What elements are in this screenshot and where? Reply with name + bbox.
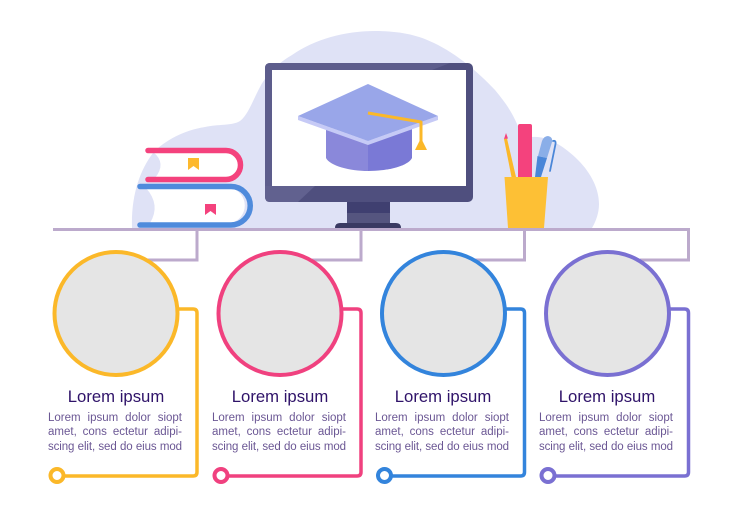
step 1 text: sed — [98, 440, 117, 452]
step 4 text: adipi- — [645, 426, 673, 438]
step 3 text: scing — [375, 440, 401, 452]
step 1 text: siopt — [158, 412, 182, 424]
step 4 text: cons — [574, 426, 598, 438]
step 4 text: scing — [539, 440, 565, 452]
monitor frame — [265, 63, 473, 202]
shelf and connectors — [53, 230, 688, 260]
step 2 text: Lorem ipsum — [232, 387, 328, 406]
step 2 text: adipi- — [318, 426, 346, 438]
step 4 text: do — [611, 440, 624, 452]
step 2 text: eius — [300, 440, 321, 452]
step 2 text: sed — [262, 440, 281, 452]
step 3 graphic — [378, 252, 524, 482]
monitor stand — [335, 202, 401, 228]
icon: monitor with graduation cap — [265, 63, 473, 228]
step 1 text: dolor — [125, 412, 151, 424]
step 4 text: amet, — [539, 426, 568, 438]
step 2 text — [212, 387, 346, 452]
step 1 text: amet, — [48, 426, 77, 438]
step 2 text: siopt — [322, 412, 346, 424]
pen — [550, 141, 556, 171]
step 2 graphic — [214, 252, 361, 482]
step 2 text: Lorem — [212, 412, 245, 424]
step 4 text: ectetur — [604, 426, 639, 438]
monitor screen — [272, 70, 466, 186]
step 1 text: Lorem ipsum — [68, 387, 164, 406]
step 3 text: sed — [425, 440, 444, 452]
icon: book stack — [140, 150, 250, 225]
tassel — [368, 113, 421, 141]
step 4 text: dolor — [616, 412, 642, 424]
step 4 text: ipsum — [579, 412, 609, 424]
step 3 text: Lorem — [375, 412, 408, 424]
step 2 text: elit, — [242, 440, 259, 452]
step 1 text: eius — [136, 440, 157, 452]
step 4 text: Lorem ipsum — [559, 387, 655, 406]
step 3 text: siopt — [485, 412, 509, 424]
step 1 text: ectetur — [113, 426, 148, 438]
step 4 text: siopt — [649, 412, 673, 424]
step 4 text: elit, — [569, 440, 586, 452]
step 1 text — [48, 387, 182, 452]
step 1 text: scing — [48, 440, 74, 452]
pencil — [504, 138, 516, 177]
step 4 text: sed — [589, 440, 608, 452]
background cloud — [132, 31, 599, 228]
step 3 text: amet, — [375, 426, 404, 438]
step 3 text: ipsum — [415, 412, 445, 424]
step 2 text: do — [284, 440, 297, 452]
step 2 text: amet, — [212, 426, 241, 438]
step 1 text: ipsum — [88, 412, 118, 424]
step 2 text: mod — [324, 440, 346, 452]
ruler — [518, 124, 532, 180]
icon: pen cup — [504, 124, 556, 228]
step 3 text: dolor — [452, 412, 478, 424]
step 3 text: Lorem ipsum — [395, 387, 491, 406]
step 1 text: mod — [160, 440, 182, 452]
step 3 text: adipi- — [481, 426, 509, 438]
step 1 text: elit, — [78, 440, 95, 452]
step 2 text: ipsum — [252, 412, 282, 424]
step 3 text: cons — [410, 426, 434, 438]
step 1 text: Lorem — [48, 412, 81, 424]
step 4 text: eius — [627, 440, 648, 452]
step 2 text: ectetur — [277, 426, 312, 438]
step 4 text: mod — [651, 440, 673, 452]
cup — [504, 177, 548, 228]
step 3 text: elit, — [405, 440, 422, 452]
step 4 graphic — [542, 252, 688, 482]
step 3 text: ectetur — [440, 426, 475, 438]
step 4 text — [539, 387, 673, 452]
step 2 text: scing — [212, 440, 238, 452]
step 2 text: dolor — [289, 412, 315, 424]
step 1 text: cons — [83, 426, 107, 438]
step 1 graphic — [50, 252, 197, 482]
lower book — [140, 186, 250, 225]
graduation cap — [298, 84, 438, 171]
step 2 text: cons — [247, 426, 271, 438]
step 4 text: Lorem — [539, 412, 572, 424]
step 3 text: eius — [463, 440, 484, 452]
step 1 text: do — [120, 440, 133, 452]
step 3 text — [375, 387, 509, 452]
step 3 text: mod — [487, 440, 509, 452]
step 1 text: adipi- — [154, 426, 182, 438]
step 3 text: do — [447, 440, 460, 452]
upper book — [148, 150, 240, 180]
